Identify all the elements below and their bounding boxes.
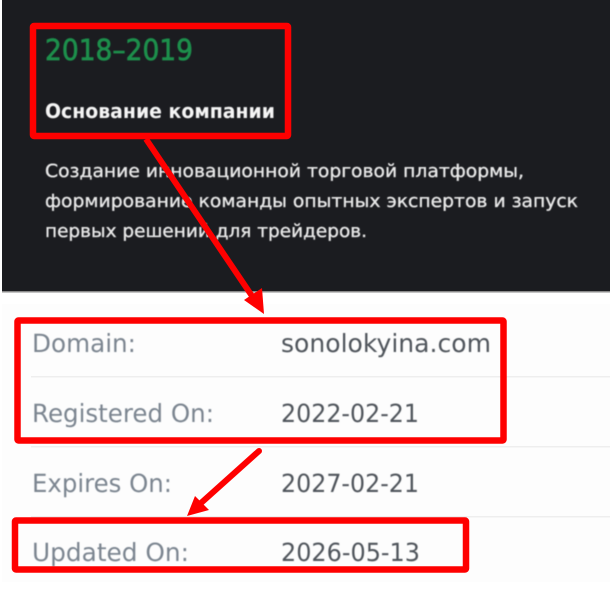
text block: founding description: первых решений для трейдеров. <box>45 221 367 242</box>
highlight box: updated date <box>15 520 466 570</box>
heading: years: 2018–2019 <box>45 33 193 67</box>
row: domain: Domain: <box>32 329 136 358</box>
row: expires on <box>32 469 419 498</box>
panel: domain information table <box>2 304 610 582</box>
row: registered on <box>32 399 419 428</box>
panel: company history dark card <box>2 0 610 292</box>
text block: founding description <box>45 161 578 242</box>
row: updated on: 2026-05-13 <box>281 538 420 567</box>
highlight box: years and heading <box>33 26 288 136</box>
row: updated on <box>32 538 420 567</box>
highlight box: domain and registered date <box>18 320 504 440</box>
row: expires on: 2027-02-21 <box>281 469 419 498</box>
row: registered on: 2022-02-21 <box>281 399 419 428</box>
arrow: company founding to domain box <box>146 139 264 314</box>
row: domain <box>32 329 491 358</box>
row: registered on: Registered On: <box>32 399 214 428</box>
heading: company founding: Основание компании <box>45 99 275 123</box>
row: domain: sonolokyina.com <box>281 329 491 358</box>
row: updated on: Updated On: <box>32 538 189 567</box>
text block: founding description: формирование команды опытных экспертов и запуск <box>45 191 578 212</box>
row: expires on: Expires On: <box>32 469 172 498</box>
arrow: registered date to updated date <box>187 451 259 516</box>
text block: founding description: Создание инновационной торговой платформы, <box>45 161 524 182</box>
